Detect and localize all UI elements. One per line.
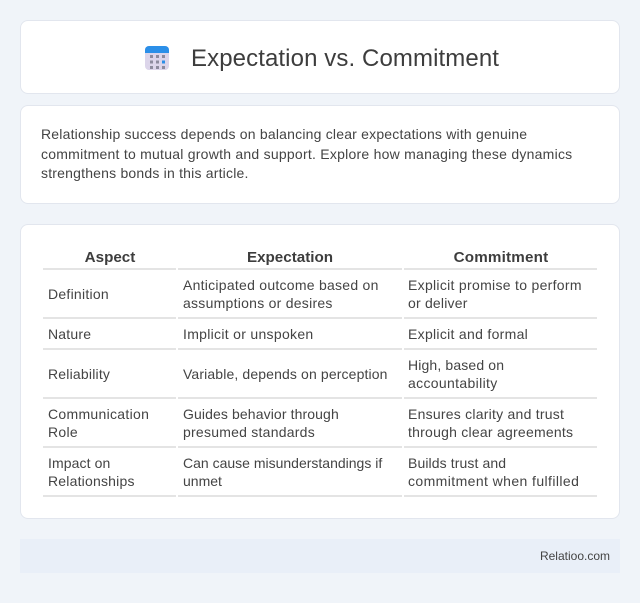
row: Definition: Explicit promise to perform — [408, 277, 582, 293]
icon: calendar — [145, 46, 169, 70]
intro text: Relationship success depends on balancing clear expectations with genuine — [41, 126, 527, 142]
title: Expectation vs. Commitment — [191, 45, 499, 72]
column heading: Expectation: Expectation — [247, 249, 333, 266]
row: Nature: Nature — [48, 326, 91, 342]
row: Impact on Relationships: commitment when fulfilled — [408, 473, 579, 489]
row: Reliability: Variable, depends on perception — [183, 366, 388, 382]
footer bar — [20, 539, 620, 573]
row: Reliability — [48, 357, 504, 391]
row: Communication Role: Ensures clarity and trust — [408, 406, 564, 422]
row: Reliability: Reliability — [48, 366, 110, 382]
row: Communication Role: through clear agreements — [408, 424, 573, 440]
row: Reliability: High, based on — [408, 357, 504, 373]
comparison table — [43, 249, 597, 497]
column heading: Commitment: Commitment — [454, 249, 548, 266]
intro text: strengthens bonds in this article. — [41, 165, 249, 181]
table card — [20, 224, 620, 519]
row: Definition: Definition — [48, 286, 109, 302]
intro text — [41, 126, 572, 181]
row: Definition — [48, 277, 582, 311]
row: Impact on Relationships: Impact on — [48, 455, 110, 471]
row: Definition: assumptions or desires — [183, 295, 333, 311]
row: Nature: Explicit and formal — [408, 326, 528, 342]
row: Nature — [48, 326, 528, 342]
row: Definition: or deliver — [408, 295, 468, 311]
row: Impact on Relationships: Builds trust and — [408, 455, 506, 471]
row: Impact on Relationships: Can cause misunderstandings if — [183, 455, 382, 471]
row: Communication Role — [48, 406, 573, 440]
footer credit: Relatioo.com — [540, 549, 610, 563]
row: Impact on Relationships: unmet — [183, 473, 222, 489]
row: Impact on Relationships: Relationships — [48, 473, 135, 489]
row: Communication Role: Communication — [48, 406, 149, 422]
intro card — [20, 105, 620, 204]
row: Impact on Relationships — [48, 455, 579, 489]
row: Reliability: accountability — [408, 375, 498, 391]
row: Communication Role: presumed standards — [183, 424, 315, 440]
row: Nature: Implicit or unspoken — [183, 326, 314, 342]
intro text: commitment to mutual growth and support. Explore how managing these dynamics — [41, 146, 572, 162]
column heading: Aspect: Aspect — [85, 249, 135, 266]
row: Communication Role: Role — [48, 424, 78, 440]
header card — [20, 20, 620, 94]
row: Communication Role: Guides behavior through — [183, 406, 339, 422]
row: Definition: Anticipated outcome based on — [183, 277, 379, 293]
